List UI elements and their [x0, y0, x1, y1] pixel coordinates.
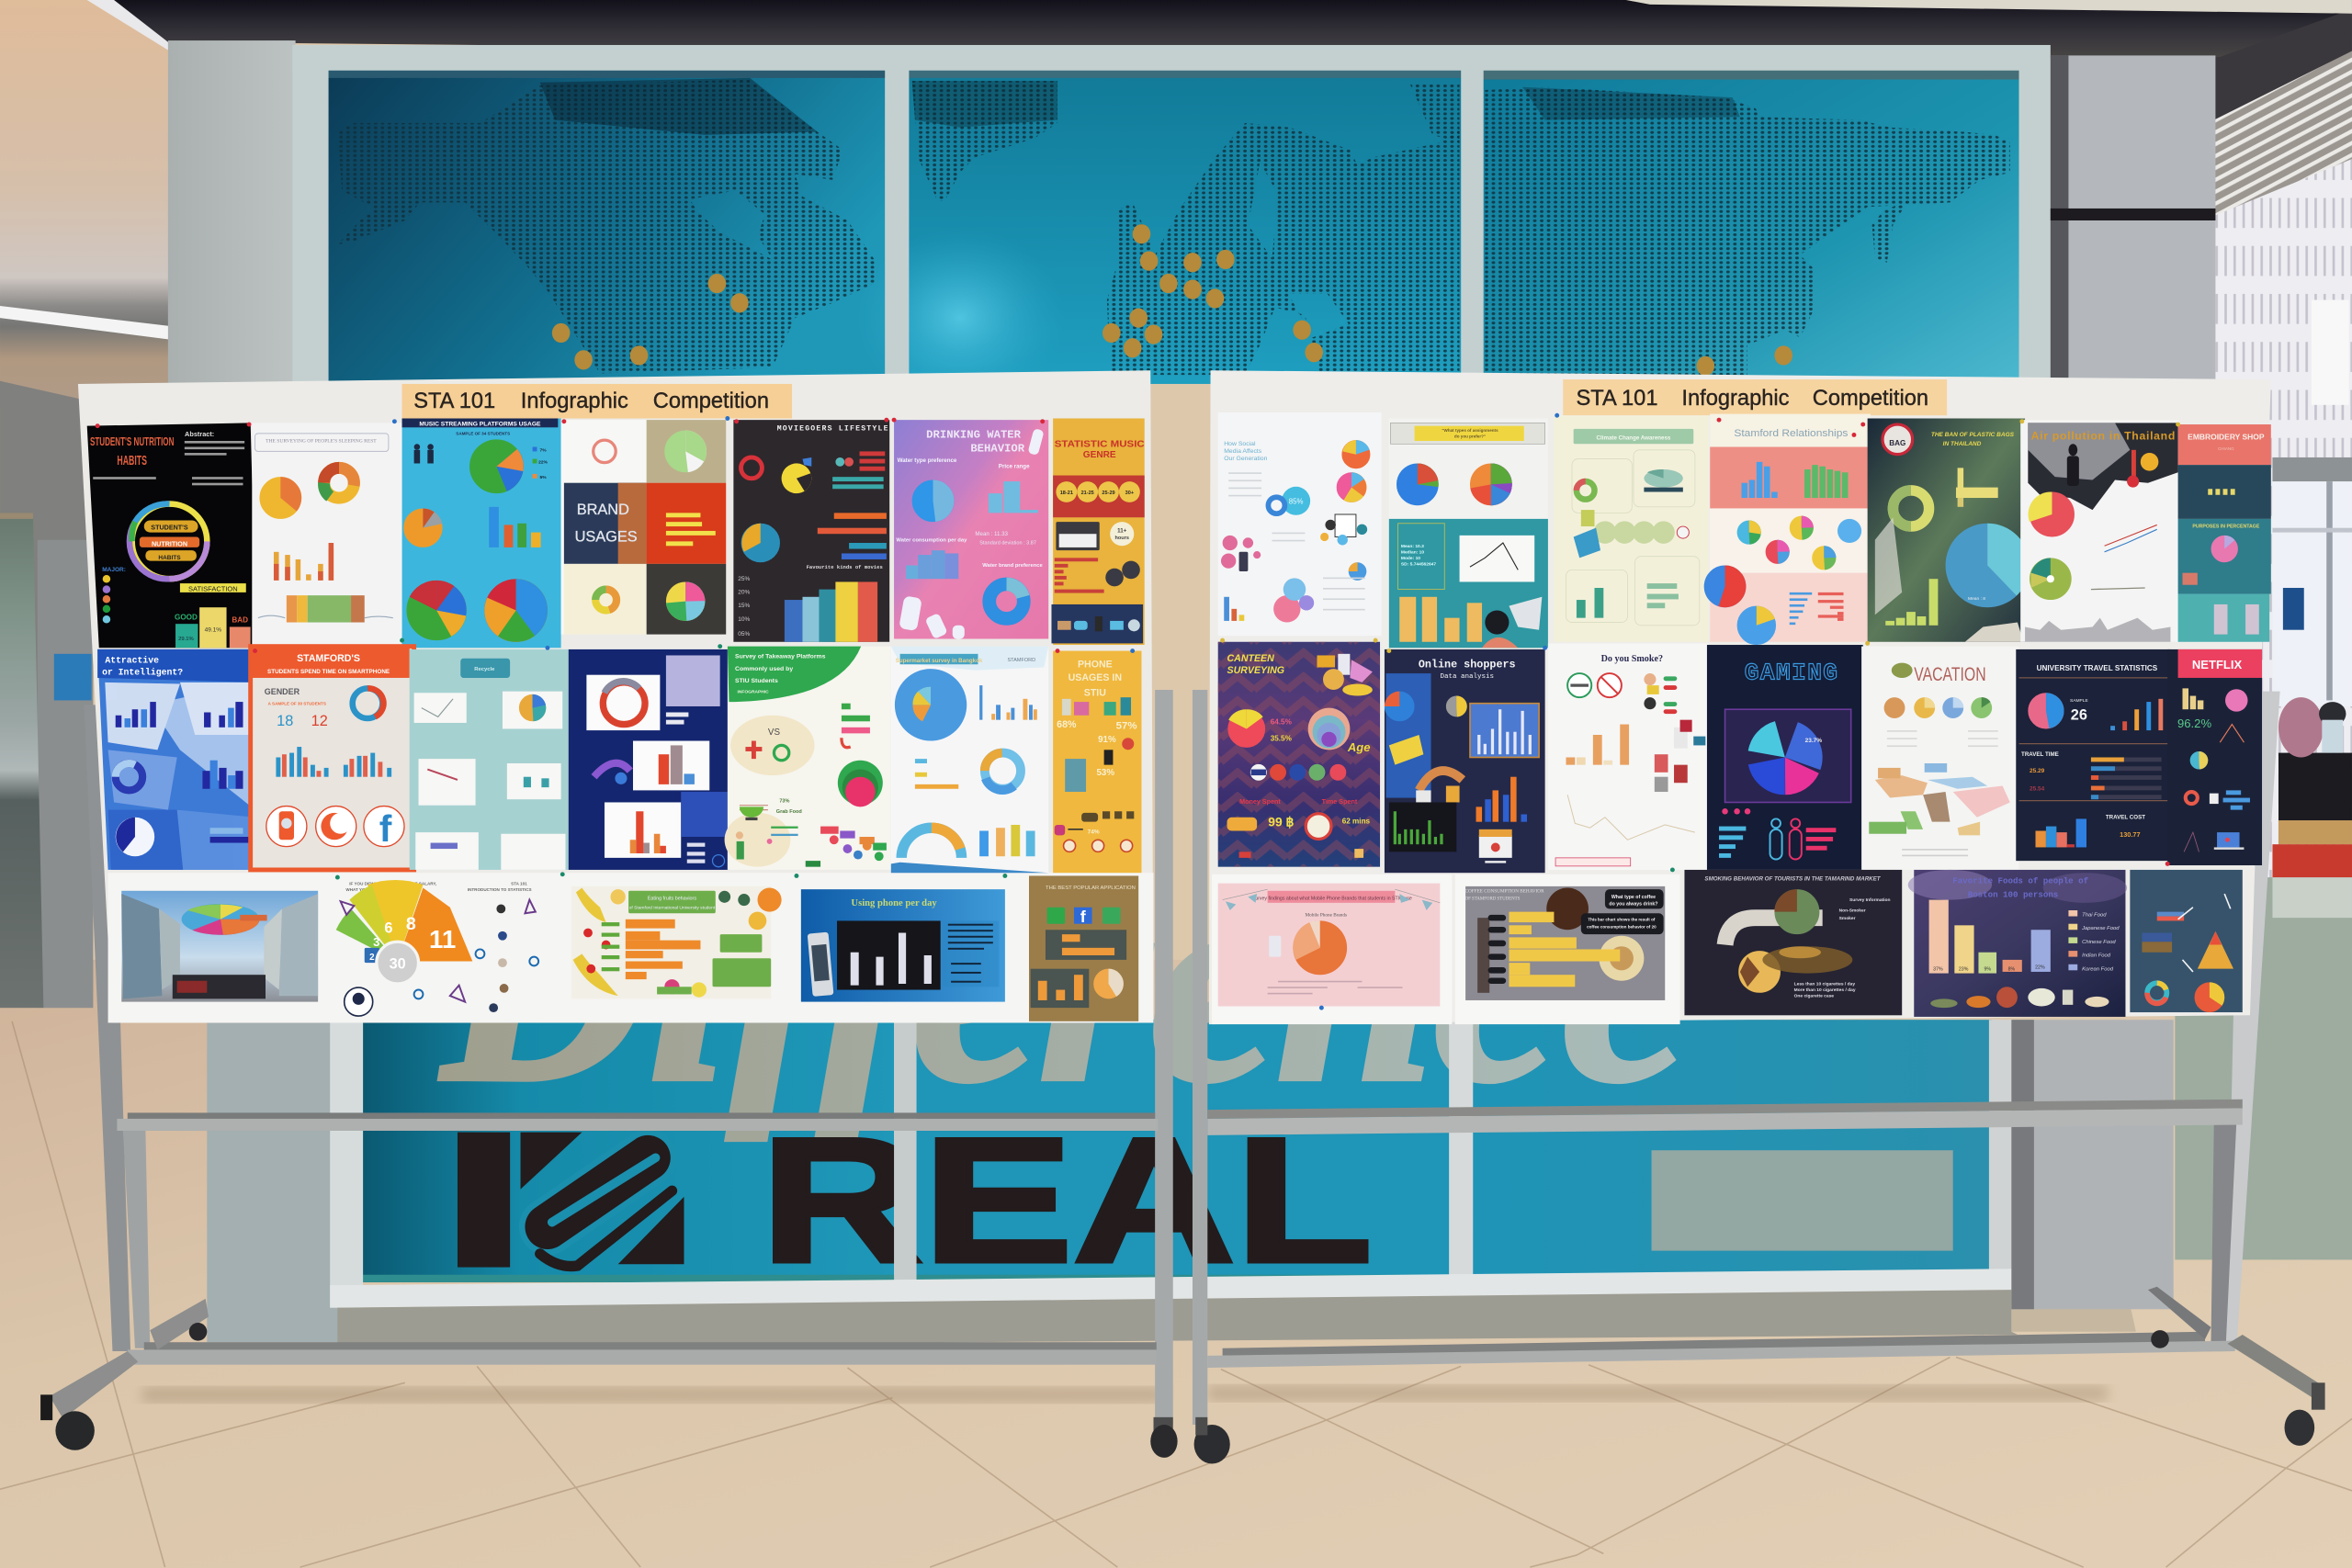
poster: Music streaming platforms usage: MUSIC STREAMING PLATFORMS USAGE [419, 422, 541, 428]
poster: Embroidery shop: PURPOSES IN PERCENTAGE [2192, 525, 2260, 530]
poster: Climate change awareness: Climate Change Awareness [1597, 434, 1671, 441]
poster: Favorite foods of people: 8% [2008, 966, 2016, 972]
poster: University travel statistics: SAMPLE [2070, 698, 2088, 704]
right column upper [2051, 55, 2215, 386]
poster: Survey of takeaway platforms: Survey of Takeaway Platforms [735, 654, 826, 660]
poster: Statistic music genre: 25-29 [1102, 491, 1115, 496]
poster: Music streaming platforms usage: 7% [540, 447, 547, 453]
poster: What you want to be fan chart: INTRODUCTION TO STATISTICS [468, 887, 532, 892]
poster: The best popular application: f [1080, 908, 1087, 926]
poster: Buildings with 3D pie [121, 891, 318, 1002]
left ceiling and wall [0, 0, 177, 1008]
poster: Coffee consumption behavior: coffee consumption behavior of 20 [1587, 925, 1657, 930]
poster: Canteen surveying [1218, 642, 1380, 867]
poster: Gaming: 23.7% [1805, 738, 1822, 744]
poster: Favorite foods of people [1908, 870, 2127, 1017]
window frame upper [292, 45, 2051, 389]
poster: Coffee consumption behavior: This bar chart shows the result of [1588, 917, 1656, 921]
poster: Canteen surveying: 35.5% [1271, 735, 1293, 743]
poster: Drinking water behavior: Water brand preference [982, 563, 1044, 569]
poster: Statistic music genre: 21-25 [1081, 491, 1094, 496]
poster: Phone usages in STIU: 68% [1057, 719, 1077, 730]
poster: Favorite foods of people: 23% [1959, 966, 1969, 972]
poster: Statistic music genre: hours [1115, 536, 1129, 541]
poster: Student's nutrition habits: BAD [232, 616, 248, 625]
poster: University travel statistics: 130.77 [2120, 830, 2141, 839]
poster: Stamford's students spend time on smartphone: 18 [277, 713, 293, 729]
poster: Netflix: NETFLIX [2192, 658, 2243, 671]
poster: What you want to be fan chart: 30 [390, 956, 406, 973]
poster: Phone usages in STIU: 91% [1098, 735, 1116, 745]
poster: Using phone per day [801, 889, 1005, 1002]
poster: How social media affects our generation [1218, 412, 1382, 636]
small blue tag left of board [54, 654, 92, 700]
left column upper [168, 40, 296, 400]
poster: What you want to be fan chart: STA 101 [511, 881, 527, 886]
poster: Stamford's students spend time on smartphone: STUDENTS SPEND TIME ON SMARTPHONE [267, 669, 390, 675]
poster: Supermarket survey in Bangkok: STAMFORD [1007, 658, 1035, 663]
stand: left frame [40, 690, 1178, 1458]
poster: Canteen surveying: 99 ฿ [1268, 815, 1295, 829]
poster: Canteen surveying: Age [1347, 740, 1371, 754]
poster: The best popular application: THE BEST POPULAR APPLICATION [1046, 886, 1136, 891]
poster: Mobile phone brands: Survey findings about what Mobile Phone Brands that students in STIU use [1252, 897, 1412, 902]
poster: Drinking water behavior: BEHAVIOR [970, 442, 1025, 455]
poster: University travel statistics: 25.29 [2030, 768, 2045, 774]
poster: Student's nutrition habits: STUDENT'S NUTRITION [90, 434, 174, 448]
poster: Embroidery shop: EMBROIDERY SHOP [2188, 432, 2265, 441]
poster: Music streaming platforms usage: 5% [540, 475, 547, 480]
poster: Coffee consumption behavior: do you always drink? [1609, 901, 1657, 907]
poster: Moviegoers lifestyle: MOVIEGOERS LIFESTYLE [777, 425, 888, 434]
right column lower [2011, 1020, 2174, 1309]
poster: Statistic music genre [1051, 419, 1145, 645]
poster: Do you smoke: Do you Smoke? [1601, 654, 1663, 664]
poster: Student's nutrition habits: HABITS [158, 555, 181, 561]
poster: The best popular application [1029, 875, 1138, 1021]
poster: Canteen surveying: CANTEEN [1227, 653, 1274, 664]
poster: Student's nutrition habits [87, 423, 256, 648]
poster: Statistic music genre: 18-21 [1060, 491, 1073, 496]
poster: Canteen surveying: SURVEYING [1227, 665, 1284, 676]
poster: Stamford's students spend time on smartphone: STAMFORD'S [297, 653, 360, 664]
poster: Drinking water behavior: Price range [999, 463, 1030, 469]
poster: Do you smoke [1548, 643, 1709, 870]
poster: What types of assignments do you prefer: Median: 10 [1401, 549, 1424, 555]
poster: Smoking behavior of tourists [1684, 870, 1902, 1015]
poster: Embroidery shop [2178, 424, 2271, 642]
right heading strip: Competition [1813, 387, 1928, 411]
poster: Drinking water behavior [894, 420, 1048, 639]
poster: The ban of plastic bags in Thailand: IN THAILAND [1943, 441, 1982, 447]
right ceiling, perforated wall and window [2175, 0, 2352, 1259]
poster: Dark blue survey report [569, 649, 729, 870]
poster: The surveying of people's sleeping rest: THE SURVEYING OF PEOPLE'S SLEEPING REST [266, 439, 377, 445]
left heading strip: Infographic [521, 389, 628, 413]
poster: Student's nutrition habits: GOOD [175, 613, 198, 621]
poster: Supermarket survey in Bangkok: Supermarket survey in Bangkok [896, 658, 983, 664]
poster: Moviegoers lifestyle: 10% [738, 616, 751, 623]
poster: Online shoppers data analysis [1385, 649, 1545, 873]
poster: Stamford's students spend time on smartphone: f [379, 807, 392, 850]
poster: Favorite foods of people: Japanese Food [2081, 926, 2120, 931]
poster: Favorite foods of people: 22% [2035, 965, 2045, 971]
window panel: Asia [1482, 69, 2019, 384]
poster: Embroidery shop: CHIANG [2218, 446, 2234, 451]
window panel: Europe and Africa [855, 69, 1463, 408]
poster: Air pollution in Thailand: Air pollution in Thailand [2031, 429, 2175, 442]
poster: Statistic music genre: GENRE [1083, 450, 1116, 460]
poster: Moviegoers lifestyle: Favourite kinds of movies [807, 564, 883, 570]
poster: Smoking behavior of tourists: SMOKING BEHAVIOR OF TOURISTS IN THE TAMARIND MARKET [1704, 875, 1882, 882]
poster: What types of assignments do you prefer: Mode: 10 [1401, 556, 1420, 561]
poster: Favorite foods of people: Boston 100 persons [1968, 889, 2058, 899]
poster: Brand usages [561, 420, 726, 635]
poster: Statistic music genre: STATISTIC MUSIC [1055, 440, 1145, 450]
poster: Moviegoers lifestyle [733, 420, 889, 642]
poster: Stamford's students spend time on smartphone: GENDER [265, 687, 300, 696]
left heading strip [402, 384, 792, 419]
poster: Smoking behavior of tourists: Survey Information [1849, 897, 1890, 903]
poster: Phone usages in STIU: 57% [1116, 720, 1137, 731]
poster: Survey of takeaway platforms: Commonly used by [735, 666, 793, 672]
poster: University travel statistics: TRAVEL TIME [2021, 751, 2059, 758]
poster: Phone usages in STIU: USAGES IN [1069, 672, 1122, 683]
poster: Stamford relationships [1710, 414, 1871, 642]
poster: How social media affects our generation: 85% [1289, 498, 1303, 506]
poster: What you want to be fan chart: 2 [369, 953, 375, 963]
poster: What you want to be fan chart: 11 [429, 925, 456, 953]
poster: Favorite foods of people: Chinese Food [2082, 940, 2116, 945]
poster: Air pollution in Thailand [2020, 420, 2179, 642]
poster: The ban of plastic bags in Thailand: BAG [1889, 439, 1905, 447]
poster: University travel statistics [2016, 649, 2170, 861]
logo: paperclip mark [458, 1133, 684, 1268]
poster: Phone usages in STIU: STIU [1084, 688, 1106, 699]
poster: What types of assignments do you prefer: Mean: 10.3 [1401, 544, 1424, 549]
left board [78, 370, 1154, 1022]
poster: Brand usages: USAGES [575, 528, 638, 545]
poster: Canteen surveying: Money Spent [1239, 798, 1281, 806]
poster: Coffee consumption behavior: OF STAMFORD STUDENTS [1465, 897, 1521, 902]
poster: Canteen surveying: 62 mins [1342, 817, 1371, 825]
poster: Student's nutrition habits: STUDENT'S [151, 524, 188, 531]
poster: Recycle [410, 649, 569, 870]
poster: Survey of takeaway platforms: VS [768, 728, 780, 738]
poster: Mobile phone brands: Mobile Phone Brands [1305, 913, 1347, 919]
poster: Attractive or intelligent: Attractive [105, 656, 159, 666]
poster: What you want to be fan chart: WHAT YOU WANT TO BE? [345, 887, 399, 892]
grey patch on glass [1652, 1150, 1953, 1251]
left heading strip: Competition [653, 389, 769, 413]
window frame lower [330, 1020, 2136, 1347]
poster: Eating fruits behaviours [571, 886, 782, 998]
lower wall word: REAL: REAL [761, 1101, 1373, 1299]
poster: Music streaming platforms usage: 22% [538, 459, 548, 465]
poster: How social media affects our generation: Our Generation [1224, 456, 1268, 462]
poster: Drinking water behavior: DRINKING WATER [926, 429, 1022, 442]
right heading strip: STA 101 [1576, 387, 1657, 411]
poster: Student's nutrition habits: NUTRITION [152, 540, 187, 547]
poster: Vacation [1861, 647, 2019, 870]
poster: What types of assignments do you prefer: do you prefer?" [1454, 434, 1486, 439]
poster: The ban of plastic bags in Thailand: Mean : 8 [1968, 596, 1985, 602]
pushpins [96, 413, 2180, 1010]
poster: Netflix: 96.2% [2177, 716, 2211, 730]
poster: Phone usages in STIU: 53% [1096, 768, 1114, 778]
stand: right frame [1193, 690, 2325, 1463]
poster: University travel statistics: UNIVERSITY TRAVEL STATISTICS [2037, 664, 2158, 672]
poster: Student's nutrition habits: HABITS [117, 454, 147, 468]
poster: Supermarket survey in Bangkok [891, 647, 1048, 873]
poster: Favorite foods of people: 37% [1933, 966, 1943, 972]
poster: Stamford's students spend time on smartphone: A SAMPLE OF 30 STUDENTS [268, 701, 326, 705]
poster: Attractive or intelligent [97, 649, 259, 870]
poster: The ban of plastic bags in Thailand [1868, 419, 2025, 642]
poster: Mobile phone brands [1212, 874, 1452, 1024]
poster: Survey of takeaway platforms: Grab Food [776, 809, 802, 815]
poster: How social media affects our generation: How Social [1224, 441, 1256, 447]
poster: What you want to be fan chart [336, 880, 538, 1016]
map location dots [552, 224, 1792, 376]
poster: University travel statistics: TRAVEL COST [2106, 814, 2145, 820]
poster: Eating fruits behaviours: Eating fruits behaviors [648, 897, 696, 902]
poster: Smoking behavior of tourists: One cigarette case [1794, 994, 1834, 999]
left column lower [207, 1020, 339, 1342]
poster: Smoking behavior of tourists: More than 10 cigarettes / day [1794, 987, 1856, 993]
poster: Coffee consumption behavior: COFFEE CONSUMPTION BEHAVIOR [1465, 888, 1544, 894]
poster: Coffee consumption behavior: What type of coffee [1611, 895, 1656, 900]
poster: Using phone per day: Using phone per day [851, 898, 937, 908]
poster: University travel statistics: 26 [2071, 707, 2087, 724]
poster: Canteen surveying: Time Spent [1322, 798, 1358, 806]
poster: Drinking water behavior: Standard deviation : 3.87 [979, 541, 1036, 547]
poster: Phone usages in STIU: PHONE [1078, 660, 1113, 671]
poster: Recycle: Recycle [474, 667, 495, 672]
poster: Canteen surveying: 64.5% [1271, 718, 1293, 727]
floor tiles [0, 960, 2352, 1568]
poster: Stamford's students spend time on smartphone: 12 [311, 713, 328, 729]
poster: What types of assignments do you prefer: "What types of assignments [1442, 428, 1498, 433]
poster: Attractive or intelligent: or Intelligent? [102, 668, 183, 678]
poster: Favorite foods of people: 9% [1984, 966, 1991, 972]
poster: Phone usages in STIU: 74% [1088, 829, 1100, 836]
poster: What you want to be fan chart: 6 [384, 919, 392, 936]
poster: Slate blue statistics flow [2130, 870, 2243, 1012]
poster: What you want to be fan chart: IF YOU DIDN'T THINK ABOUT THE SALARY, [349, 881, 436, 886]
poster: Drinking water behavior: Water consumption per day [896, 537, 967, 543]
poster: Coffee consumption behavior [1455, 874, 1680, 1024]
poster: Smoking behavior of tourists: Smoker [1839, 916, 1856, 921]
poster: Moviegoers lifestyle: 15% [738, 603, 751, 609]
poster: Survey of takeaway platforms: 73% [779, 798, 789, 804]
poster: Favorite foods of people: Favorite Foods of people of [1952, 876, 2088, 886]
lower glass wall [360, 1020, 1992, 1282]
poster: Online shoppers data analysis: Online shoppers [1419, 659, 1516, 671]
poster: Survey of takeaway platforms: INFOGRAPHIC [738, 689, 769, 694]
poster: What you want to be fan chart: 3 [373, 935, 379, 949]
poster: University travel statistics: 25.54 [2030, 785, 2045, 792]
poster: Smoking behavior of tourists: Less than 10 cigarettes / day [1794, 982, 1855, 987]
poster: Music streaming platforms usage [402, 419, 561, 648]
poster: Student's nutrition habits: SATISFACTION [188, 584, 238, 592]
poster: Student's nutrition habits: 49.1% [205, 626, 221, 633]
lower wall word: Difference: Difference [438, 826, 1688, 1141]
poster: Moviegoers lifestyle: 20% [738, 590, 751, 596]
ceiling panel top right [1626, 0, 2352, 14]
poster: Moviegoers lifestyle: 25% [738, 576, 751, 582]
poster: Drinking water behavior: Mean : 11.33 [975, 531, 1009, 537]
poster: Favorite foods of people: Korean Food [2082, 966, 2114, 972]
poster: Netflix [2167, 649, 2262, 865]
left heading strip: STA 101 [413, 389, 495, 413]
poster: Eating fruits behaviours: of Stamford International University student [629, 905, 716, 910]
window panel: North America [327, 69, 885, 384]
poster: Favorite foods of people: Thai Food [2082, 913, 2107, 919]
poster: Gaming [1707, 645, 1863, 870]
poster: Phone usages in STIU [1053, 651, 1141, 873]
poster: What you want to be fan chart: 8 [406, 914, 416, 934]
poster: How social media affects our generation: Media Affects [1224, 448, 1262, 455]
poster: Favorite foods of people: Indian Food [2082, 953, 2111, 959]
left board bottom row sheet [108, 873, 1154, 1022]
poster: Survey of takeaway platforms: STIU Students [735, 678, 778, 684]
poster: Stamford's students spend time on smartphone [251, 647, 414, 870]
poster: Statistic music genre: 30+ [1125, 491, 1135, 496]
poster: The ban of plastic bags in Thailand: THE BAN OF PLASTIC BAGS [1931, 432, 2015, 438]
poster: Student's nutrition habits: 29.1% [178, 637, 194, 642]
poster: Music streaming platforms usage: SAMPLE OF 34 STUDENTS [456, 431, 510, 435]
right board [1209, 370, 2271, 1024]
poster: Brand usages: BRAND [577, 502, 629, 518]
poster: What types of assignments do you prefer: SD: 5.744562647 [1401, 562, 1436, 568]
poster: Climate change awareness [1554, 415, 1709, 642]
poster: Stamford relationships: Stamford Relationships [1734, 428, 1849, 439]
poster: Drinking water behavior: Water type preference [898, 457, 957, 464]
right heading strip [1563, 379, 1947, 415]
poster: Moviegoers lifestyle: 05% [738, 631, 751, 637]
poster: What types of assignments do you prefer [1389, 419, 1548, 648]
right heading strip: Infographic [1681, 387, 1790, 411]
ceiling soffit [114, 0, 2352, 60]
poster: Gaming: GAMING [1745, 660, 1838, 687]
poster: Student's nutrition habits: MAJOR: [102, 567, 126, 573]
poster: Survey of takeaway platforms [725, 647, 891, 870]
poster: Online shoppers data analysis: Data analysis [1440, 673, 1494, 681]
poster: Smoking behavior of tourists: Non-Smoker [1839, 908, 1866, 914]
poster: The surveying of people's sleeping rest [252, 423, 402, 648]
poster: Student's nutrition habits: Abstract: [185, 430, 214, 438]
poster: Statistic music genre: 11+ [1117, 528, 1127, 535]
poster: Vacation: VACATION [1914, 664, 1986, 685]
